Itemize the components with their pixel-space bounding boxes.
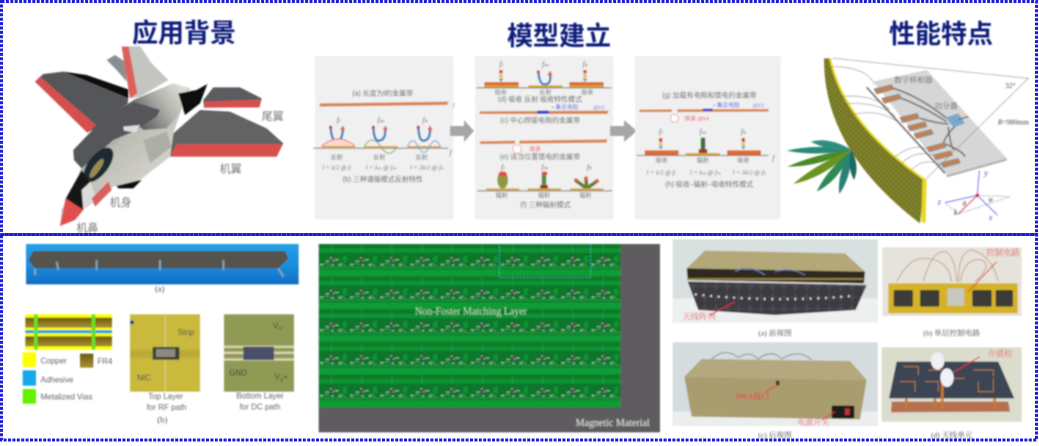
panel: absorption and radiation modes: 吸收 <box>495 88 507 96</box>
panel: absorption radiation absorption model: 吸收 <box>656 156 668 164</box>
panel: antenna prototype and layer stack: (a) <box>155 283 165 293</box>
photo: front view <box>673 239 878 323</box>
legend: materials: Copper <box>41 356 67 365</box>
panel: absorption radiation absorption model: l = 3λ/2 @ fₕ <box>733 169 766 176</box>
photo: bottom layer: V <box>273 321 278 330</box>
panel: metal strip reflection modes: 反射 <box>416 154 428 162</box>
panel: prototype photos <box>673 239 1022 440</box>
panel: absorption and radiation modes: (c) 中心焊接电阻的金属带 <box>500 115 580 124</box>
panel: absorption and radiation modes: fₗ <box>501 162 505 171</box>
photo: antenna unit: 介质柱 <box>987 348 1013 358</box>
panel: metal strip reflection modes: fₘ <box>377 115 384 124</box>
panel: absorption radiation absorption model: 吸收 <box>737 156 749 164</box>
illustration: fighter jet with labelled parts: 机翼 <box>220 162 242 176</box>
arrow: second process step <box>610 120 637 142</box>
illustration: conformal array with feed network: z <box>937 196 942 206</box>
photo: top layer: Strip <box>178 328 195 337</box>
photo: rear view <box>673 342 878 427</box>
panel: absorption radiation absorption model: l = λₘ @ fₘ <box>690 169 721 176</box>
panel: absorption and radiation modes: fₘ <box>542 60 549 69</box>
photo: control circuit: 控制电路 <box>986 248 1020 258</box>
panel: antenna prototype and layer stack <box>23 244 299 424</box>
photo: bottom layer: V <box>275 373 280 382</box>
panel: absorption radiation absorption model: • 集总电阻 <box>713 101 740 109</box>
panel: absorption radiation absorption model: (h) 吸收–辐射–吸收特性模式 <box>665 179 753 188</box>
panel: metal strip reflection modes: l = λₘ @ fₘ <box>366 164 396 171</box>
panel: metal strip reflection modes: 反射 <box>331 154 343 162</box>
heading: application background: 应用背景 <box>132 18 236 48</box>
legend: materials <box>23 352 113 404</box>
illustration: fighter jet with labelled parts: 机身 <box>110 195 132 209</box>
panel: absorption radiation absorption model: f <box>772 154 775 163</box>
photo: antenna strip on blue background <box>26 244 299 284</box>
heading: performance features: 性能特点 <box>889 19 993 49</box>
panel: absorption and radiation modes: 反射 <box>539 88 551 96</box>
panel: metal strip reflection modes: fₗ <box>337 115 341 124</box>
illustration: fighter jet with labelled parts: 尾翼 <box>262 110 284 123</box>
panel: absorption and radiation modes: fₗ <box>499 60 503 69</box>
illustration: conformal array with feed network <box>787 58 1029 223</box>
panel: absorption and radiation modes: 吸收 <box>581 88 593 96</box>
arrow: first process step <box>450 120 474 142</box>
panel: non-Foster matching layer photo: Magnetic Material <box>576 418 650 429</box>
caption: rear view: (c) 后视图 <box>758 430 792 440</box>
panel: antenna prototype and layer stack: (b) <box>157 414 167 424</box>
panel: absorption radiation absorption model: fₗ <box>659 127 663 136</box>
illustration: conformal array with feed network: θ <box>963 199 967 208</box>
panel: metal strip reflection modes: l = 3λ/2 @ fₕ <box>410 164 444 171</box>
panel: absorption and radiation modes: fₘ <box>541 162 548 171</box>
photo: rear view: 电源开关 <box>797 417 829 427</box>
panel: antenna prototype and layer stack: Bottom Layer <box>236 392 284 401</box>
panel: metal strip reflection modes: f <box>449 148 452 157</box>
panel: antenna prototype and layer stack: Top Layer <box>148 392 184 401</box>
photo: bottom layer: GND <box>229 369 247 378</box>
panel: absorption radiation absorption model: l = λ/2 @ fₗ <box>647 169 676 176</box>
illustration: conformal array with feed network: y <box>983 168 988 178</box>
photo: antenna unit <box>882 347 1022 422</box>
illustration: conformal array with feed network: 数字移相器 <box>894 75 933 85</box>
panel: absorption radiation absorption model: fₕ <box>741 127 746 136</box>
photo: control circuit <box>882 247 1022 316</box>
panel: absorption radiation absorption model: (g) 加载有电阻和馈电的金属带 <box>662 91 756 100</box>
panel: non-Foster matching layer photo <box>319 244 660 432</box>
legend: materials: FR4 <box>97 357 113 366</box>
heading: model building: 模型建立 <box>507 21 611 51</box>
panel: absorption and radiation modes <box>475 56 613 219</box>
panel: metal strip reflection modes: l <box>453 102 455 109</box>
panel: antenna prototype and layer stack: for RF path <box>147 403 187 412</box>
frame: top dotted border <box>2 2 1036 234</box>
panel: absorption and radiation modes: • 集总电阻 <box>552 103 579 111</box>
photo: bottom layer: S <box>278 326 282 332</box>
panel: absorption radiation absorption model: 辐射 <box>697 156 709 164</box>
legend: materials: Metalized Vias <box>41 393 92 402</box>
photo: top layer: NIC <box>137 373 151 382</box>
panel: absorption and radiation modes: fₕ <box>587 162 592 171</box>
panel: absorption radiation absorption model: 馈源 @l/4 <box>684 115 709 123</box>
frame: bottom dotted border <box>2 234 1036 440</box>
panel: metal strip reflection modes <box>313 56 455 219</box>
panel: absorption and radiation modes: 辐射 <box>579 192 591 200</box>
panel: absorption and radiation modes: fₕ <box>582 60 588 69</box>
panel: metal strip reflection modes: (b) 三种谐振模式反射特性 <box>343 175 423 184</box>
panel: absorption and radiation modes: (e) 适当位置馈电的金属带 <box>500 152 580 161</box>
caption: front view: (a) 前视图 <box>758 327 792 337</box>
illustration: fighter jet with labelled parts <box>35 46 284 234</box>
illustration: conformal array with feed network: x <box>988 212 993 222</box>
panel: absorption and radiation modes: @l/2 <box>593 105 605 111</box>
panel: absorption radiation absorption model <box>635 56 781 219</box>
caption: antenna unit: (d) 天线单元 <box>931 430 973 440</box>
illustration: conformal array with feed network: 32° <box>1005 81 1016 90</box>
photo: bottom layer: - <box>282 321 285 330</box>
panel: absorption and radiation modes: (d) 吸收 反射 吸收特性模式 <box>498 95 582 104</box>
illustration: conformal array with feed network: R=980mm <box>997 117 1029 126</box>
photo: bottom layer <box>224 314 294 392</box>
panel: metal strip reflection modes: 反射 <box>373 154 385 162</box>
panel: absorption and radiation modes: 辐射 <box>496 192 508 200</box>
panel: metal strip reflection modes: (a) 长度为l的金属带 <box>352 89 413 98</box>
illustration: conformal array with feed network: 功分器 <box>935 101 958 111</box>
panel: absorption and radiation modes: 馈源 <box>529 145 541 153</box>
photo: rear view: SMA接口 <box>735 391 769 401</box>
illustration: conformal array with feed network: φ <box>989 195 993 204</box>
photo: top layer <box>130 314 200 392</box>
panel: antenna prototype and layer stack: for DC path <box>240 403 280 412</box>
legend: materials: Adhesive <box>41 376 74 385</box>
panel: absorption and radiation modes: (f) 三种辐射模式 <box>520 200 571 209</box>
panel: absorption radiation absorption model: fₘ <box>699 127 706 136</box>
illustration: fighter jet with labelled parts: 机鼻 <box>76 220 98 234</box>
panel: metal strip reflection modes: fₕ <box>422 115 428 124</box>
panel: metal strip reflection modes: l = λ/2 @ fₗ <box>322 164 352 171</box>
photo: bottom layer: + <box>283 373 288 382</box>
photo: bottom layer: S <box>280 377 284 383</box>
caption: control circuit: (b) 单层控制电路 <box>923 327 980 337</box>
panel: absorption and radiation modes: 辐射 <box>538 192 550 200</box>
illustration: conformal array with feed network: k <box>954 208 958 217</box>
diagram: layer stack <box>25 314 112 350</box>
photo: front view: 天线阵列 <box>682 312 716 322</box>
panel: absorption radiation absorption model: @l/2 <box>753 103 764 109</box>
panel: non-Foster matching layer photo: Non-Foster Matching Layer <box>415 307 528 318</box>
